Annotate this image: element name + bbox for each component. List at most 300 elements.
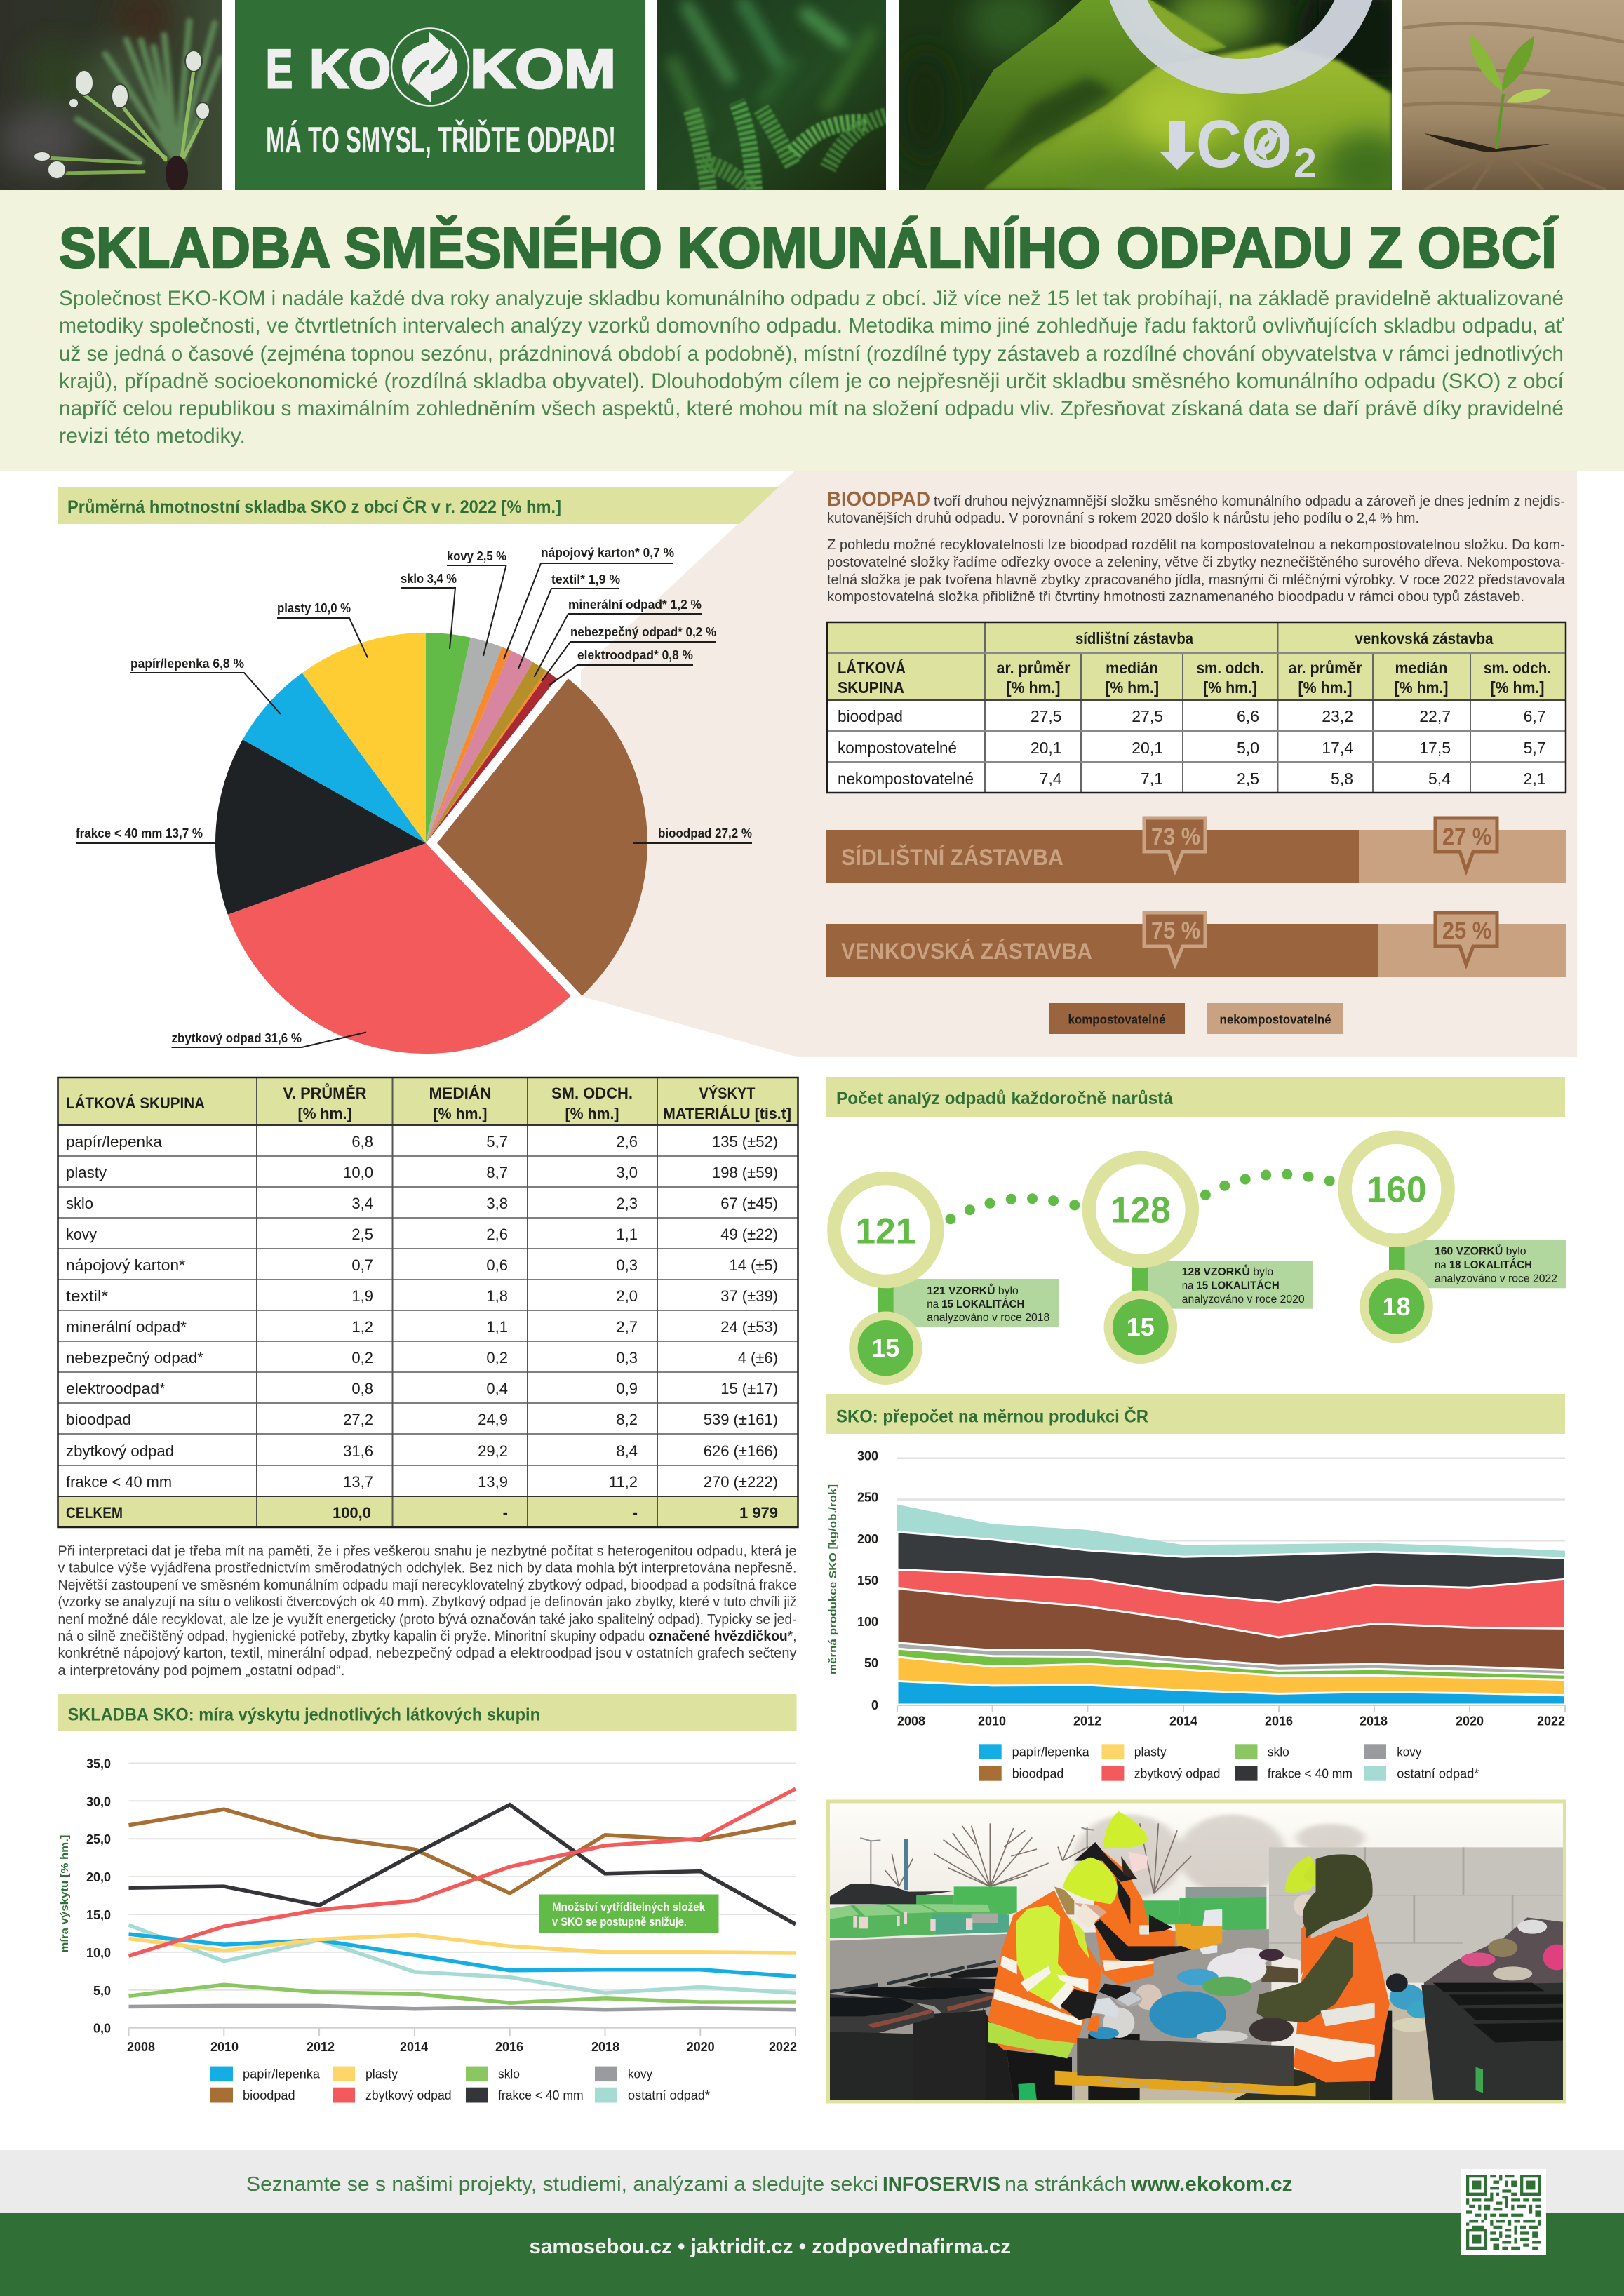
photo: fern <box>657 0 886 190</box>
row: sklo: 67 (±45) <box>720 1195 778 1212</box>
row: elektroodpad: 15 (±17) <box>720 1380 778 1397</box>
x axis labels: 2014 <box>400 2040 428 2054</box>
table head: [% hm.] <box>434 1105 487 1122</box>
intro text <box>59 287 1564 448</box>
row: bioodpad: bioodpad <box>838 707 903 725</box>
y axis labels: 10,0 <box>86 1946 111 1960</box>
y axis labels <box>857 1449 878 1712</box>
row: nápojový karton: 0,3 <box>616 1256 638 1274</box>
label: plasty: plasty 10,0 % <box>277 601 351 615</box>
x axis labels: 2016 <box>495 2040 523 2054</box>
row: celkem: 1 979 <box>739 1504 778 1522</box>
footer band: links: samosebou.cz • jaktridit.cz • zodpovednafirma.cz <box>529 2236 1011 2258</box>
interpretation note: Největší zastoupení ve směsném komunálním odpadu mají nerecyklovatelný zbytkový odpad, bioodpad a podsítná frakce <box>58 1578 797 1593</box>
table head: V. PRŮMĚR <box>283 1082 367 1102</box>
row: elektroodpad <box>66 1380 778 1397</box>
x axis labels: 2022 <box>769 2040 797 2054</box>
table header: [% hm.] <box>1395 678 1448 697</box>
row: bioodpad: 22,7 <box>1419 707 1451 725</box>
row: minerální odpad: 1,2 <box>351 1318 373 1336</box>
table header: venkovská zástavba <box>1355 629 1494 647</box>
logo wordmark <box>266 28 616 105</box>
row: zbytkový odpad: zbytkový odpad <box>66 1442 174 1460</box>
row: nápojový karton: 0,6 <box>486 1256 508 1274</box>
row: celkem: 100,0 <box>333 1504 371 1522</box>
row: textil: 2,0 <box>616 1287 638 1305</box>
table header: [% hm.] <box>1006 678 1061 697</box>
y axis labels: 0 <box>871 1698 878 1712</box>
row: kompostovatelné: 17,4 <box>1322 739 1353 757</box>
bioodpad text: BIOODPAD <box>827 488 930 511</box>
table: bioodpad by settlement type: SKUPINA <box>838 678 904 697</box>
callout: 27 %: 27 % <box>1442 824 1491 850</box>
row: nebezpečný odpad: 0,2 <box>486 1349 508 1367</box>
row: frakce: 13,9 <box>478 1473 508 1491</box>
row: plasty: 8,7 <box>486 1164 508 1181</box>
x axis labels: 2018 <box>591 2040 619 2054</box>
row: frakce: 270 (±222) <box>704 1473 778 1491</box>
label: elektroodpad: elektroodpad* 0,8 % <box>577 648 693 662</box>
row: elektroodpad: 0,9 <box>616 1380 638 1397</box>
legend: line chart: kovy <box>628 2067 652 2081</box>
row: kompostovatelné: 20,1 <box>1031 739 1062 757</box>
x axis labels: 2010 <box>210 2040 239 2054</box>
row: minerální odpad <box>66 1318 778 1336</box>
heading: specific production: SKO: přepočet na měrnou produkci ČR <box>836 1406 1148 1427</box>
label: kovy: kovy 2,5 % <box>447 549 506 563</box>
row: minerální odpad: minerální odpad* <box>66 1318 187 1336</box>
row: nebezpečný odpad: 0,3 <box>616 1349 638 1367</box>
y axis labels: 150 <box>857 1573 878 1587</box>
callout: separable fractions decreasing: v SKO se postupně snižuje. <box>552 1915 687 1928</box>
icon: down arrow and CO2: O <box>1242 107 1292 182</box>
row: celkem: - <box>633 1504 638 1522</box>
row: nekompostovatelné: 2,1 <box>1524 770 1546 788</box>
row: bioodpad: 8,2 <box>616 1411 638 1428</box>
icon: down arrow and CO2: C <box>1196 107 1242 182</box>
milestone 2020: 15 <box>1127 1313 1155 1341</box>
row: nápojový karton <box>66 1256 778 1274</box>
row: plasty: 198 (±59) <box>712 1164 778 1181</box>
row: elektroodpad: 0,4 <box>486 1380 508 1397</box>
callout: 27 % <box>1435 818 1497 871</box>
photo: pine needles with droplets <box>0 0 222 192</box>
row: minerální odpad: 2,7 <box>616 1318 638 1336</box>
label: papír/lepenka: papír/lepenka 6,8 % <box>130 657 244 671</box>
row: minerální odpad: 24 (±53) <box>720 1318 778 1336</box>
table head: [% hm.] <box>565 1105 619 1122</box>
x axis labels <box>897 1714 1565 1728</box>
table header: [% hm.] <box>1105 678 1159 697</box>
y axis labels: 200 <box>857 1532 878 1546</box>
table head: SM. ODCH. <box>551 1085 633 1102</box>
intro text: krajů), případně socioekonomické (rozdílná skladba obyvatel). Dlouhodobým cílem je co nejpřesněji určit skladbu směsného komunálního odpadu (SKO) z obcí <box>59 370 1564 393</box>
row: bioodpad: 27,5 <box>1031 707 1062 725</box>
row: nápojový karton: 14 (±5) <box>729 1256 778 1274</box>
table header: sídlištní zástavba <box>1075 629 1193 647</box>
blurred needles <box>77 21 221 163</box>
table header: ar. průměr <box>996 659 1071 677</box>
heading: number of analyses: Počet analýz odpadů každoročně narůstá <box>836 1089 1173 1108</box>
legend: area chart: frakce < 40 mm <box>1268 1766 1353 1780</box>
row: celkem: - <box>503 1504 508 1522</box>
y axis labels: 250 <box>857 1490 878 1504</box>
row: nebezpečný odpad <box>66 1349 778 1367</box>
row: bioodpad: 6,6 <box>1237 707 1259 725</box>
row: bioodpad: 539 (±161) <box>704 1411 778 1428</box>
footer band: infoservis: www.ekokom.cz <box>1130 2173 1292 2196</box>
x axis labels: 2012 <box>307 2040 335 2054</box>
interpretation note: (vzorky se analyzují na sítu o velikosti čtvercových ok 40 mm). Zbytkový odpad je definován jako zbytky, které v tuto chvíli již <box>58 1595 797 1610</box>
label: sklo: sklo 3,4 % <box>401 572 457 586</box>
callout: 75 % <box>1144 913 1205 965</box>
y axis title: míra výskytu [% hm.] <box>59 1835 71 1953</box>
title: SKLADBA SMĚSNÉHO KOMUNÁLNÍHO ODPADU Z OBCÍ <box>59 215 1558 280</box>
row: nekompostovatelné: 7,4 <box>1040 770 1062 788</box>
intro text: Společnost EKO-KOM i nadále každé dva roky analyzuje skladbu komunálního odpadu z obcí. Již více než 15 let tak probíhají, na základě pravidelně aktualizované <box>59 287 1564 310</box>
row: frakce: frakce < 40 mm <box>66 1473 172 1491</box>
row: bioodpad <box>66 1411 778 1428</box>
table header: sm. odch. <box>1197 659 1264 677</box>
table: bioodpad by settlement type <box>827 622 1566 793</box>
row: sklo: 2,3 <box>616 1195 638 1212</box>
legend: area chart: zbytkový odpad <box>1134 1766 1220 1780</box>
milestone 2020 <box>1089 1157 1313 1360</box>
row: bioodpad: 23,2 <box>1322 707 1353 725</box>
row: nekompostovatelné: 7,1 <box>1141 770 1163 788</box>
row: bioodpad: 27,2 <box>343 1411 373 1428</box>
interpretation note: v tabulce výše vyjádřena prostřednictvím směrodatných odchylek. Bez nich by data mohla být interpretována nepřesně. <box>58 1560 797 1576</box>
QR code <box>1461 2169 1546 2255</box>
logo slogan: MÁ TO SMYSL, TŘIĎTE ODPAD! <box>266 119 616 161</box>
y axis labels: 20,0 <box>86 1870 111 1884</box>
row: zbytkový odpad: 626 (±166) <box>704 1442 778 1460</box>
bioodpad text: tvoří druhou nejvýznamnější složku směsného komunálního odpadu a zároveň je dnes jedním z nejdis- <box>934 494 1565 509</box>
milestone 2018: 121 VZORKŮ bylo <box>927 1284 1019 1297</box>
bioodpad text: telná složka je pak tvořena hlavně zbytky zpracovaného jídla, masnými či mléčnými výrobky. V roce 2022 představovala <box>827 572 1566 588</box>
waste bins left <box>829 1961 1014 2100</box>
table head <box>66 1082 791 1122</box>
bioodpad text: kutovanějších druhů odpadu. V porovnání s rokem 2020 došlo k nárůstu jeho podílu o 2,4 % hm. <box>827 511 1419 526</box>
milestone 2022: 18 <box>1383 1292 1411 1321</box>
intro text: revizi této metodiky. <box>59 424 246 448</box>
row: bioodpad: 24,9 <box>478 1411 508 1428</box>
photo background: left part <box>829 1823 1191 2100</box>
background blur <box>898 0 1396 161</box>
x axis labels <box>127 2040 797 2054</box>
bare tree <box>885 1823 1191 1893</box>
row: zbytkový odpad: 8,4 <box>616 1442 638 1460</box>
row: bioodpad <box>838 707 1546 725</box>
row: sklo: 3,8 <box>486 1195 508 1212</box>
logo wordmark: E <box>266 38 293 100</box>
y axis labels: 35,0 <box>86 1757 111 1771</box>
icon: down arrow and CO2: 2 <box>1294 140 1317 187</box>
row: plasty: plasty <box>66 1164 107 1181</box>
icon: CO2 ring <box>1120 0 1362 76</box>
series lines <box>129 1789 796 2010</box>
row: bioodpad: 6,7 <box>1524 707 1546 725</box>
front-left worker <box>988 1858 1142 2100</box>
stacked areas <box>897 1505 1565 1705</box>
milestone 2018: 121 <box>855 1211 915 1252</box>
row: kovy: 2,6 <box>486 1226 508 1243</box>
intro text: napříč celou republikou s maximálním zohledněním všech aspektů, které mohou mít na složení odpadu vliv. Zpřesňovat získaná data se daří právě díky pravidelné <box>59 397 1564 420</box>
legend: area chart: papír/lepenka <box>1012 1745 1090 1759</box>
dotted connectors <box>946 1169 1335 1224</box>
table header: [% hm.] <box>1298 678 1353 697</box>
milestone 2020: na 15 LOKALITÁCH <box>1182 1280 1280 1292</box>
milestone 2020: 128 VZORKŮ bylo <box>1182 1265 1273 1278</box>
stacked bar: venkovská zástavba <box>826 913 1566 977</box>
pie labels with leader lines <box>76 563 752 1047</box>
milestone 2018: 15 <box>871 1334 899 1362</box>
table header: medián <box>1395 659 1448 677</box>
heading: number of analyses <box>826 1077 1565 1117</box>
legend: line chart <box>210 2067 710 2103</box>
bioodpad text: Z pohledu možné recyklovatelnosti lze bioodpad rozdělit na kompostovatelnou a nekompostovatelnou složku. Do kom- <box>827 537 1565 553</box>
table header: sm. odch. <box>1484 659 1551 677</box>
milestone 2020: 128 <box>1110 1190 1171 1231</box>
row: sklo: 3,4 <box>351 1195 373 1212</box>
logo wordmark: KO <box>309 38 391 100</box>
rear worker <box>1074 1811 1191 2100</box>
milestone 2018: analyzováno v roce 2018 <box>927 1312 1049 1324</box>
x axis labels: 2008 <box>127 2040 155 2054</box>
legend: compostable: nekompostovatelné <box>1219 1013 1331 1027</box>
heading: average composition <box>58 487 779 524</box>
row: zbytkový odpad <box>66 1442 778 1460</box>
legend: area chart: bioodpad <box>1012 1766 1063 1780</box>
sorting table <box>1055 2038 1316 2096</box>
photo: moss with CO2 symbol <box>899 0 1392 190</box>
milestone 2020: analyzováno v roce 2020 <box>1182 1294 1305 1305</box>
row: nekompostovatelné: 5,4 <box>1428 770 1451 788</box>
y axis labels: 100 <box>857 1615 878 1629</box>
x axis labels: 2012 <box>1073 1714 1101 1728</box>
row: kompostovatelné <box>838 739 1546 757</box>
row: kompostovatelné: 5,0 <box>1237 739 1259 757</box>
photo background: right part <box>828 1803 1571 2100</box>
milestone 2018: na 15 LOKALITÁCH <box>927 1298 1024 1310</box>
row: zbytkový odpad: 29,2 <box>478 1442 508 1460</box>
row: nekompostovatelné: nekompostovatelné <box>838 770 974 788</box>
legend: line chart: bioodpad <box>243 2088 295 2102</box>
row: sklo <box>66 1195 778 1212</box>
row: sklo: sklo <box>66 1195 93 1212</box>
legend: compostable <box>1049 1003 1343 1034</box>
row: papír/lepenka: 2,6 <box>616 1133 638 1150</box>
row: kovy: 2,5 <box>351 1226 373 1243</box>
interpretation note: ná o silně znečištěný odpad, hygienické potřeby, zbytky kapalin či pryže. Minoritní skupiny odpadu označené hvězdičkou*, <box>58 1629 797 1644</box>
stacked bar: sídlištní zástavba <box>826 818 1566 883</box>
row: papír/lepenka <box>66 1133 778 1150</box>
row: kovy: kovy <box>66 1226 97 1243</box>
interpretation note: Při interpretaci dat je třeba mít na paměti, že i přes veškerou snahu je nezbytné počítat s heterogenitou odpadu, která je <box>58 1543 797 1559</box>
y axis labels: 50 <box>864 1656 878 1670</box>
row: papír/lepenka: 6,8 <box>351 1133 373 1150</box>
label: textil: textil* 1,9 % <box>551 572 620 586</box>
table head: LÁTKOVÁ SKUPINA <box>66 1094 205 1112</box>
row: nekompostovatelné: 5,8 <box>1331 770 1353 788</box>
heading: average composition: Průměrná hmotnostní skladba SKO z obcí ČR v r. 2022 [% hm.] <box>67 496 561 517</box>
callout: 73 %: 73 % <box>1151 824 1200 850</box>
photo: workers sorting waste <box>828 1801 1571 2102</box>
legend: line chart: papír/lepenka <box>243 2067 321 2081</box>
legend: area chart: kovy <box>1397 1745 1421 1759</box>
bioodpad text: postovatelné složky řadíme odřezky ovoce a zeleniny, větve či zbytky neznečištěného surového dřeva. Nekompostova- <box>827 555 1565 570</box>
milestone 2022: 160 VZORKŮ bylo <box>1435 1244 1526 1258</box>
timeline: growth of analyses <box>834 1137 1566 1381</box>
legend: line chart: plasty <box>365 2067 398 2081</box>
footer band: infoservis <box>0 2150 1624 2213</box>
row: textil: textil* <box>66 1287 108 1305</box>
y axis labels <box>86 1757 111 2036</box>
milestone 2022 <box>1345 1137 1566 1338</box>
bioodpad text: kompostovatelná složka přibližně tři čtvrtiny hmotnosti zaznamenaného bioodpadu v rámci obou typů zástaveb. <box>827 589 1524 605</box>
logo panel: EKO-KOM <box>235 0 645 190</box>
y axis labels: 300 <box>857 1449 878 1463</box>
row: bioodpad: bioodpad <box>66 1411 131 1428</box>
heading: occurrence rate: SKLADBA SKO: míra výskytu jednotlivých látkových skupin <box>67 1705 540 1725</box>
y axis labels: 30,0 <box>86 1794 111 1808</box>
x axis labels: 2020 <box>687 2040 715 2054</box>
y axis labels: 25,0 <box>86 1832 111 1846</box>
row: nápojový karton: 0,7 <box>351 1256 373 1274</box>
y axis labels: 5,0 <box>93 1984 111 1998</box>
callout: separable fractions decreasing <box>539 1894 718 1933</box>
row: papír/lepenka: papír/lepenka <box>66 1133 163 1150</box>
callout: 73 % <box>1144 818 1205 871</box>
label: nebezpečný odpad: nebezpečný odpad* 0,2 % <box>570 625 716 639</box>
label: frakce: frakce < 40 mm 13,7 % <box>76 826 203 840</box>
x axis labels: 2014 <box>1169 1714 1197 1728</box>
milestone 2022: analyzováno v roce 2022 <box>1435 1273 1557 1285</box>
intro text: metodiky společnosti, ve čtvrtletních intervalech analýzy vzorků domovního odpadu. Metodika mimo jiné zohledňuje řadu faktorů ovlivňujících skladbu odpadu, ať <box>59 314 1564 337</box>
row: bioodpad: 27,5 <box>1132 707 1163 725</box>
row: kompostovatelné: kompostovatelné <box>838 739 957 757</box>
legend: compostable: kompostovatelné <box>1068 1013 1166 1027</box>
x axis labels: 2016 <box>1265 1714 1293 1728</box>
table header: [% hm.] <box>1203 678 1257 697</box>
area chart: specific production <box>827 1449 1565 1781</box>
sharp needles <box>46 70 203 173</box>
legend: area chart: plasty <box>1134 1745 1167 1759</box>
stacked bar: sídlištní zástavba: SÍDLIŠTNÍ ZÁSTAVBA <box>841 845 1063 870</box>
table: composition of mixed waste <box>58 1077 798 1527</box>
legend: area chart: ostatní odpad* <box>1397 1766 1479 1780</box>
moss band <box>925 0 1226 190</box>
row: frakce <box>66 1473 778 1491</box>
label: bioodpad: bioodpad 27,2 % <box>658 826 752 840</box>
pie chart <box>76 546 752 1054</box>
table: bioodpad by settlement type: LÁTKOVÁ <box>838 658 906 677</box>
row: plasty <box>66 1164 778 1181</box>
callout: 25 %: 25 % <box>1442 918 1491 944</box>
milestone 2022: na 18 LOKALITÁCH <box>1435 1259 1532 1271</box>
legend: line chart: frakce < 40 mm <box>498 2088 584 2102</box>
table header: medián <box>1106 659 1158 677</box>
heading: occurrence rate <box>58 1694 797 1731</box>
callout: 25 % <box>1435 913 1497 965</box>
row: plasty: 3,0 <box>616 1164 638 1181</box>
row: kovy: 1,1 <box>616 1226 638 1243</box>
row: papír/lepenka: 135 (±52) <box>712 1133 778 1150</box>
footer band: infoservis: na stránkách <box>1005 2173 1127 2196</box>
logo wordmark: KOM <box>470 38 616 100</box>
row: kovy: 49 (±22) <box>720 1226 778 1243</box>
y axis title: měrná produkce SKO [kg/ob./rok] <box>827 1484 839 1674</box>
row: kovy <box>66 1226 778 1243</box>
x axis labels: 2008 <box>897 1714 925 1728</box>
stacked bar: venkovská zástavba: VENKOVSKÁ ZÁSTAVBA <box>841 939 1092 964</box>
row: celkem <box>66 1504 778 1522</box>
right worker and waste <box>1089 1854 1392 2100</box>
table header <box>996 629 1551 697</box>
header photo strip <box>0 0 1624 203</box>
row: kompostovatelné: 5,7 <box>1524 739 1546 757</box>
row: zbytkový odpad: 31,6 <box>343 1442 373 1460</box>
row: kompostovatelné: 20,1 <box>1132 739 1163 757</box>
row: frakce: 13,7 <box>343 1473 373 1491</box>
photo: sprout on tree stump <box>1402 0 1624 190</box>
interpretation note: a interpretovány pod pojmem „ostatní odpad“. <box>58 1663 345 1679</box>
table header: ar. průměr <box>1288 659 1362 677</box>
heading: specific production <box>826 1394 1565 1434</box>
panel: bioodpad background <box>581 471 1577 1057</box>
row: nápojový karton: nápojový karton* <box>66 1256 185 1274</box>
row: nebezpečný odpad: 0,2 <box>351 1349 373 1367</box>
table head: MEDIÁN <box>429 1085 491 1102</box>
row: textil: 37 (±39) <box>720 1287 778 1305</box>
x axis labels: 2010 <box>978 1714 1006 1728</box>
label: minerální odpad: minerální odpad* 1,2 % <box>568 598 702 612</box>
waste on sorting table <box>1089 1948 1294 2043</box>
footer band: infoservis: Seznamte se s našimi projekty, studiemi, analýzami a sledujte sekci <box>246 2173 878 2196</box>
row: nekompostovatelné: 2,5 <box>1237 770 1259 788</box>
milestone 2018 <box>834 1179 1059 1381</box>
legend: line chart: sklo <box>498 2067 520 2081</box>
label: zbytkový odpad: zbytkový odpad 31,6 % <box>171 1031 302 1045</box>
intro panel <box>0 190 1624 471</box>
row: textil <box>66 1287 778 1305</box>
bioodpad text <box>827 488 1566 605</box>
table head: [% hm.] <box>297 1105 352 1122</box>
row: nekompostovatelné <box>838 770 1546 788</box>
row: frakce: 11,2 <box>609 1473 638 1491</box>
callout: separable fractions decreasing: Množství vytříditelných složek <box>552 1900 705 1914</box>
table head: VÝSKYT <box>699 1085 756 1102</box>
line chart: occurrence rate <box>59 1757 797 2103</box>
table header: [% hm.] <box>1490 678 1545 697</box>
callout: 75 %: 75 % <box>1151 918 1200 944</box>
interpretation note: konkrétně nápojový karton, textil, minerální odpad, nebezpečný odpad a elektroodpad jsou v ostatních grafech sečteny <box>58 1646 797 1661</box>
x axis labels: 2020 <box>1456 1714 1484 1728</box>
row: nebezpečný odpad: nebezpečný odpad* <box>66 1349 203 1367</box>
label: nápojový karton: nápojový karton* 0,7 % <box>541 546 674 560</box>
icon: down arrow and CO2 <box>1160 107 1317 187</box>
row: kompostovatelné: 17,5 <box>1419 739 1451 757</box>
right worker <box>1232 1854 1392 2100</box>
milestone 2022: 160 <box>1367 1169 1427 1210</box>
footer band: infoservis: INFOSERVIS <box>883 2173 1000 2196</box>
row: textil: 1,9 <box>351 1287 373 1305</box>
interpretation note: není možné dále recyklovat, ale lze je využít energeticky (proto bývá označován také jako spalitelný odpad). Typicky se jed- <box>58 1612 797 1627</box>
table head: MATERIÁLU [tis.t] <box>663 1105 791 1122</box>
footer band: links <box>0 2213 1624 2296</box>
row: elektroodpad: 0,8 <box>351 1380 373 1397</box>
legend: line chart: zbytkový odpad <box>365 2088 452 2102</box>
